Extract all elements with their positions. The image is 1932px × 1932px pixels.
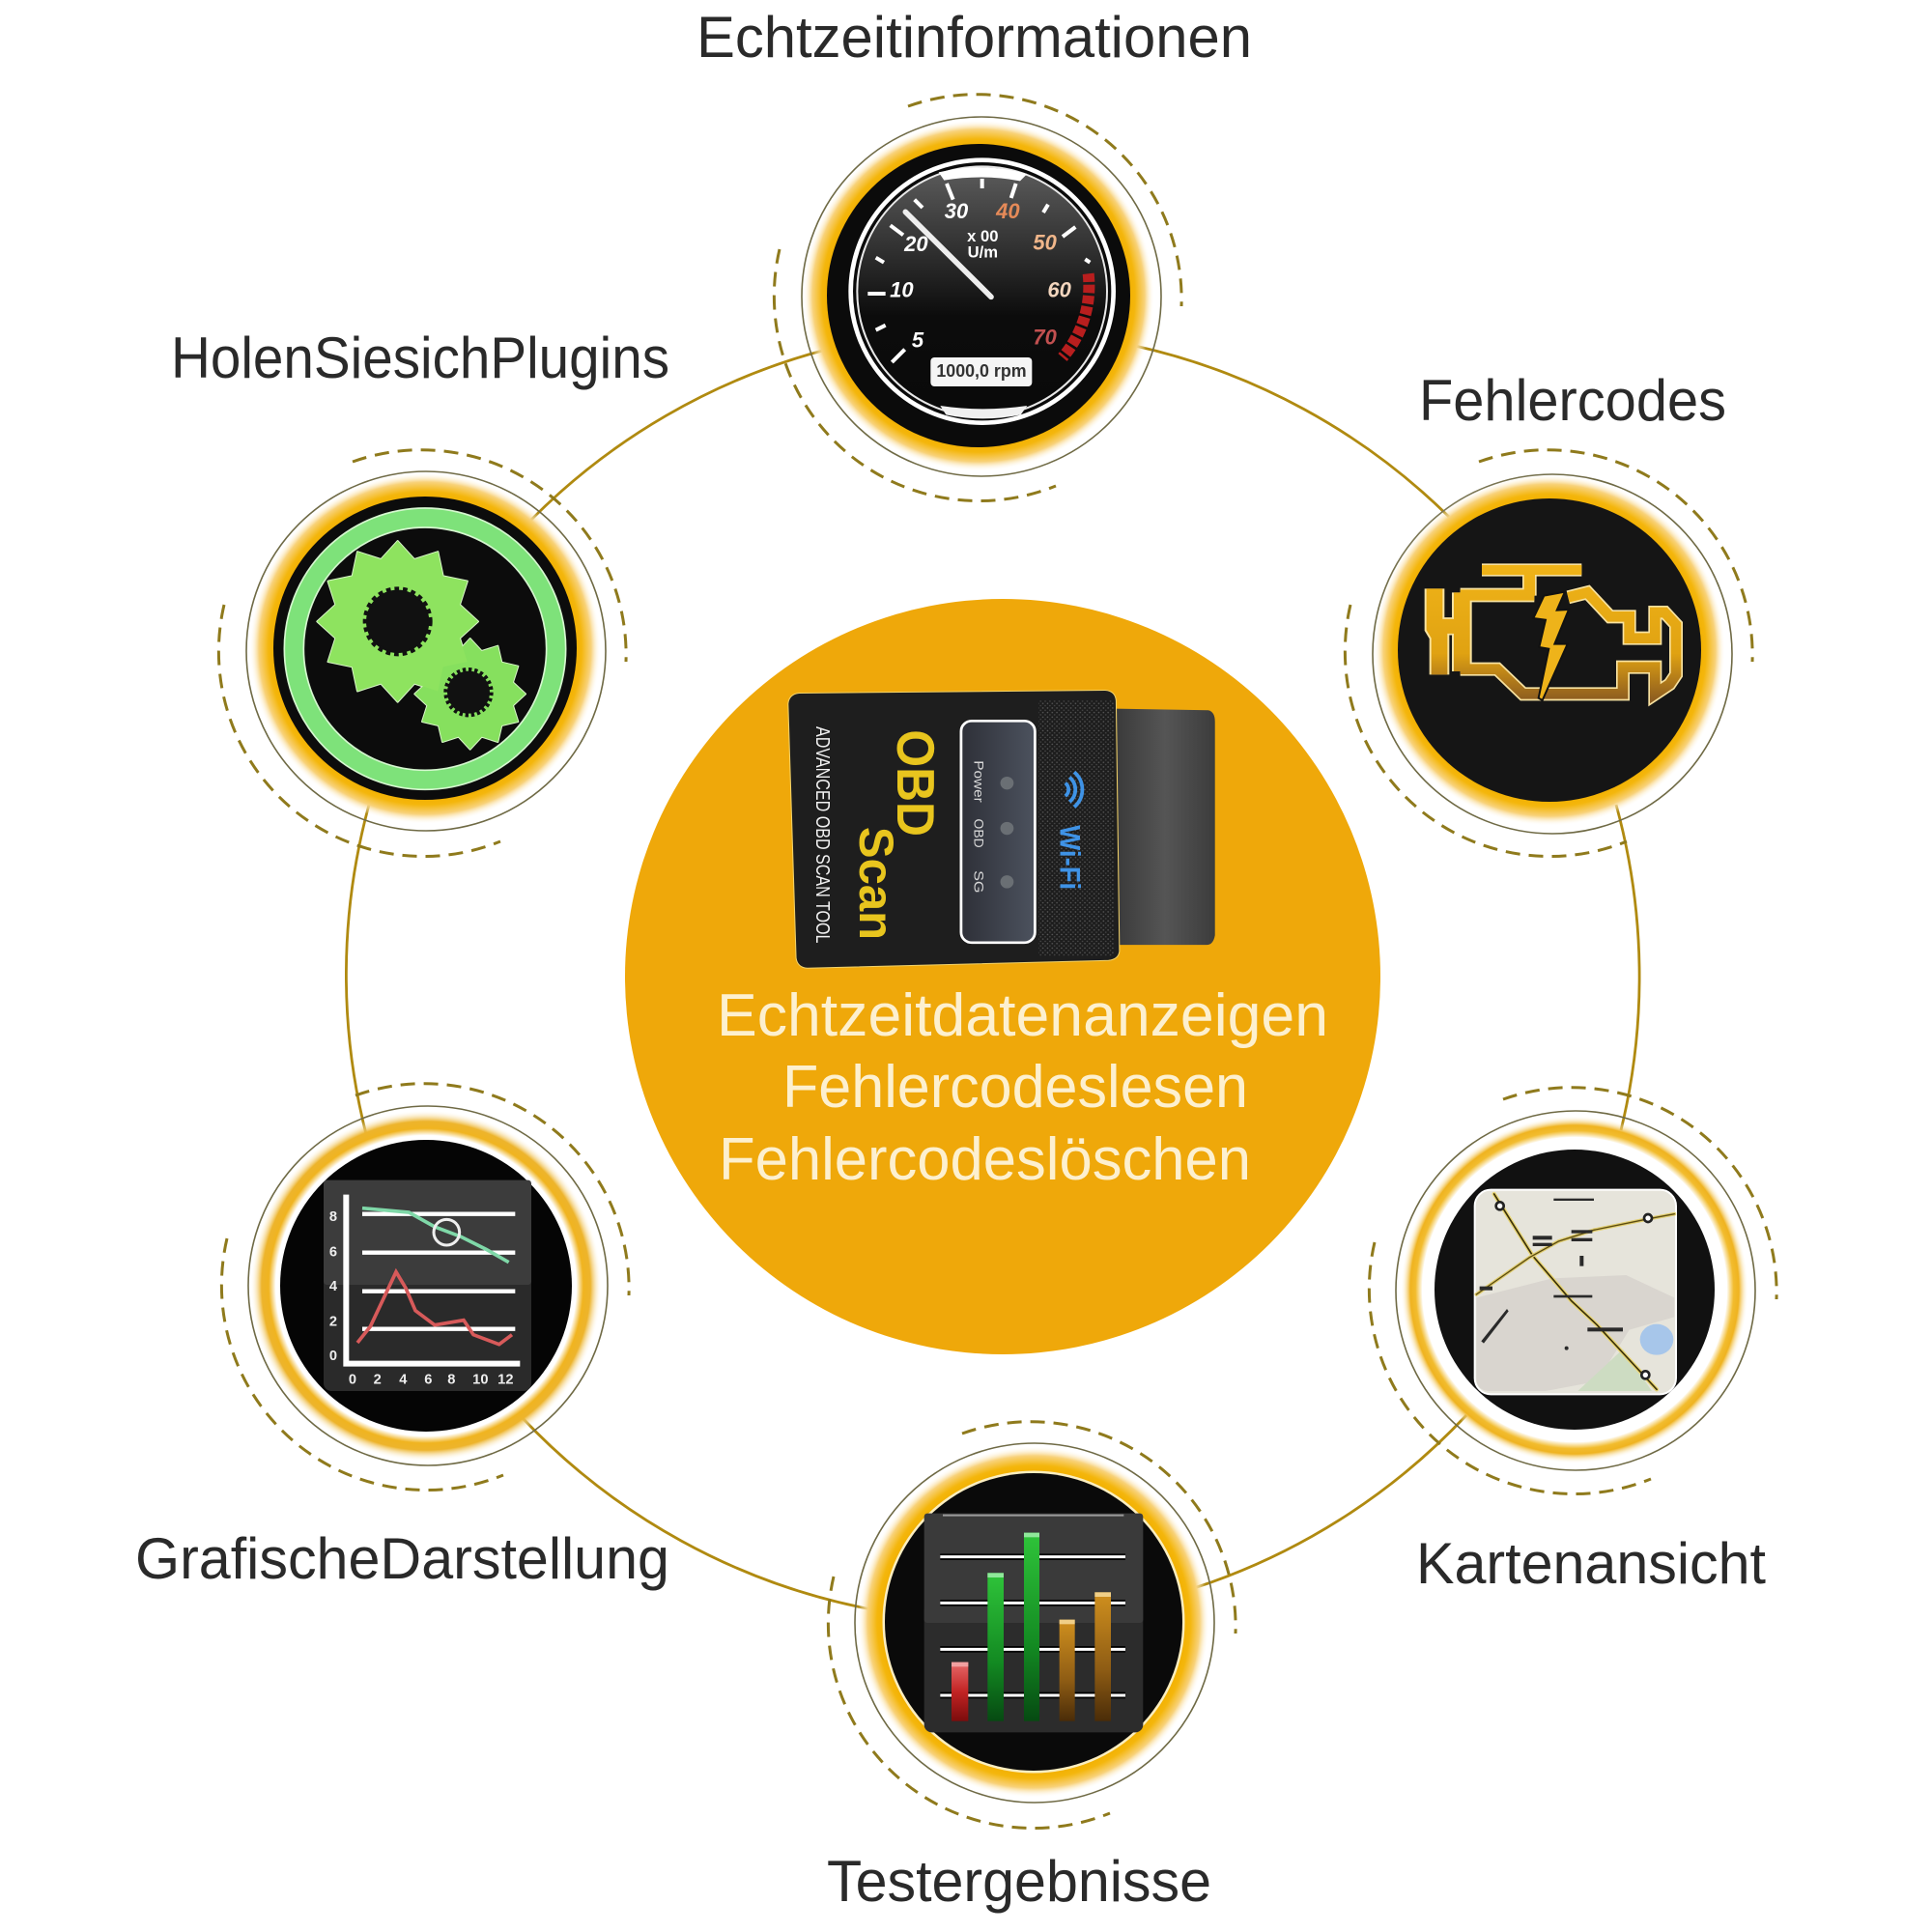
dial numbers: 30 [945, 199, 969, 223]
panel: central orange circle [625, 599, 1380, 1354]
device body [788, 691, 1120, 968]
label: Kartenansicht: Kartenansicht [1416, 1531, 1766, 1596]
label: HolenSiesichPlugins: HolenSiesichPlugins [171, 326, 669, 390]
dial numbers: 20 [903, 232, 928, 256]
gold glow ring [1374, 474, 1725, 826]
axes [346, 1195, 520, 1364]
axis numbers: 0 [329, 1349, 337, 1364]
device connector [1115, 709, 1215, 945]
thin ring [246, 471, 606, 831]
dashed arcs [774, 95, 1181, 501]
dial numbers: 5 [912, 327, 924, 352]
dashed arcs [221, 1084, 629, 1491]
thin ring [1373, 474, 1732, 834]
label: GrafischeDarstellung: GrafischeDarstellung [135, 1526, 669, 1591]
dial numbers: 50 [1033, 230, 1058, 254]
lightning bolt [1533, 592, 1569, 700]
indicator window [961, 721, 1035, 943]
thin ring [1396, 1111, 1755, 1470]
black disc [1435, 1150, 1715, 1430]
axis numbers: 4 [329, 1279, 338, 1294]
dashed arcs [218, 450, 626, 857]
tick marks [867, 179, 1090, 362]
gears [284, 508, 566, 789]
engine outline [1435, 570, 1676, 694]
panel: map icon [1369, 1088, 1776, 1494]
connector ring segments [346, 346, 1639, 1609]
tall brown bar [1094, 1592, 1111, 1721]
red zone [1063, 273, 1089, 357]
axis numbers: 8 [447, 1373, 455, 1388]
urban area [1476, 1275, 1674, 1391]
dial numbers [890, 199, 1072, 352]
wifi text: Wi-Fi [1053, 825, 1085, 890]
green area [1577, 1350, 1652, 1391]
thin ring [802, 117, 1161, 476]
gear outlines [317, 541, 526, 750]
axis numbers: 8 [329, 1209, 337, 1225]
LED labels: SG [972, 870, 986, 894]
axis numbers: 12 [497, 1373, 513, 1388]
unit label: x 00 [967, 227, 999, 245]
axis numbers: 0 [349, 1373, 356, 1388]
dashed arcs [1369, 1088, 1776, 1494]
gold glow ring [1401, 1116, 1748, 1463]
green series [362, 1208, 509, 1263]
white edge [883, 1470, 1184, 1774]
dial numbers: 10 [890, 277, 914, 301]
large gear [317, 541, 478, 702]
unit label: U/m [968, 243, 998, 262]
top line [943, 1513, 1123, 1519]
gold glow ring [858, 1446, 1209, 1798]
axis numbers: 4 [399, 1373, 408, 1388]
LED labels: Power [972, 760, 986, 803]
gold glow ring [249, 472, 601, 824]
rpm readout [930, 357, 1032, 386]
short brown bar [1060, 1620, 1075, 1721]
axis numbers: 2 [329, 1315, 337, 1330]
orange disc [625, 599, 1380, 1354]
tall green bar [1024, 1533, 1039, 1721]
engine outline edge [1435, 570, 1676, 694]
LED labels [972, 760, 986, 894]
thin ring [855, 1443, 1214, 1803]
location markers [1496, 1202, 1652, 1378]
panel: engine warning icon [1345, 450, 1752, 857]
small gear hole [447, 671, 490, 714]
map base [1475, 1190, 1676, 1394]
central feature text: Echtzeitdatenanzeigen [717, 982, 1328, 1049]
main roads [1476, 1194, 1674, 1389]
large gear hole [366, 590, 429, 653]
red bar [952, 1662, 968, 1721]
map [1475, 1190, 1676, 1394]
panel: gauge icon [774, 95, 1181, 501]
axis numbers: 6 [424, 1373, 432, 1388]
black disc [1398, 498, 1701, 802]
red series [357, 1272, 512, 1345]
small gear [414, 639, 526, 750]
green bar [987, 1573, 1004, 1721]
LED labels: OBD [972, 819, 986, 848]
gold glow ring [250, 1110, 602, 1462]
marker circle [434, 1219, 460, 1245]
speedometer: 1000,0 rpm [936, 360, 1027, 381]
top and bottom caps [939, 167, 1027, 181]
dial face [858, 167, 1106, 415]
lake [1640, 1324, 1673, 1355]
axis numbers [329, 1209, 513, 1388]
chart panel [324, 1265, 531, 1391]
unit label [967, 227, 999, 262]
axis numbers: 2 [374, 1373, 382, 1388]
grid lines [940, 1557, 1125, 1695]
speedometer [851, 160, 1114, 423]
gold glow ring [803, 120, 1154, 471]
panel: line chart icon [221, 1084, 629, 1491]
textured panel [1038, 700, 1114, 956]
bar chart [924, 1514, 1143, 1732]
green ring [284, 508, 566, 789]
line chart [324, 1180, 531, 1391]
LED dots [1001, 777, 1013, 889]
central feature text: Fehlercodeslesen [782, 1054, 1248, 1121]
panel: gears icon [218, 450, 626, 857]
label: Testergebnisse: Testergebnisse [827, 1849, 1211, 1914]
grid lines [362, 1214, 515, 1329]
axis numbers: 6 [329, 1245, 337, 1261]
engine symbol [1435, 570, 1676, 700]
dial numbers: 70 [1033, 326, 1058, 350]
dashed arcs [1345, 450, 1752, 857]
wifi symbol [1065, 772, 1082, 807]
dial numbers: 40 [995, 199, 1020, 223]
label: Echtzeitinformationen: Echtzeitinformationen [696, 5, 1252, 70]
axis numbers: 10 [472, 1373, 488, 1388]
black disc [885, 1473, 1182, 1771]
tagline text: ADVANCED OBD SCAN TOOL [811, 726, 833, 943]
central feature text [717, 982, 1328, 1193]
OBD logo text: OBD [886, 729, 945, 837]
black disc [827, 144, 1130, 447]
panel: bar chart icon [828, 1422, 1236, 1829]
OBD scanner device [788, 691, 1215, 968]
thin ring [248, 1106, 608, 1465]
dial rim [851, 160, 1114, 423]
needle [905, 212, 991, 297]
dial numbers: 60 [1047, 277, 1072, 301]
central feature text: Fehlercodeslöschen [719, 1126, 1251, 1193]
label: Fehlercodes: Fehlercodes [1419, 368, 1726, 433]
Scan logo text: Scan [849, 827, 903, 940]
black disc [273, 497, 577, 800]
chart panel [924, 1604, 1143, 1732]
white inner ring [1422, 1137, 1727, 1442]
place name marks [1480, 1199, 1623, 1350]
dashed arcs [828, 1422, 1236, 1829]
black disc [280, 1140, 572, 1432]
